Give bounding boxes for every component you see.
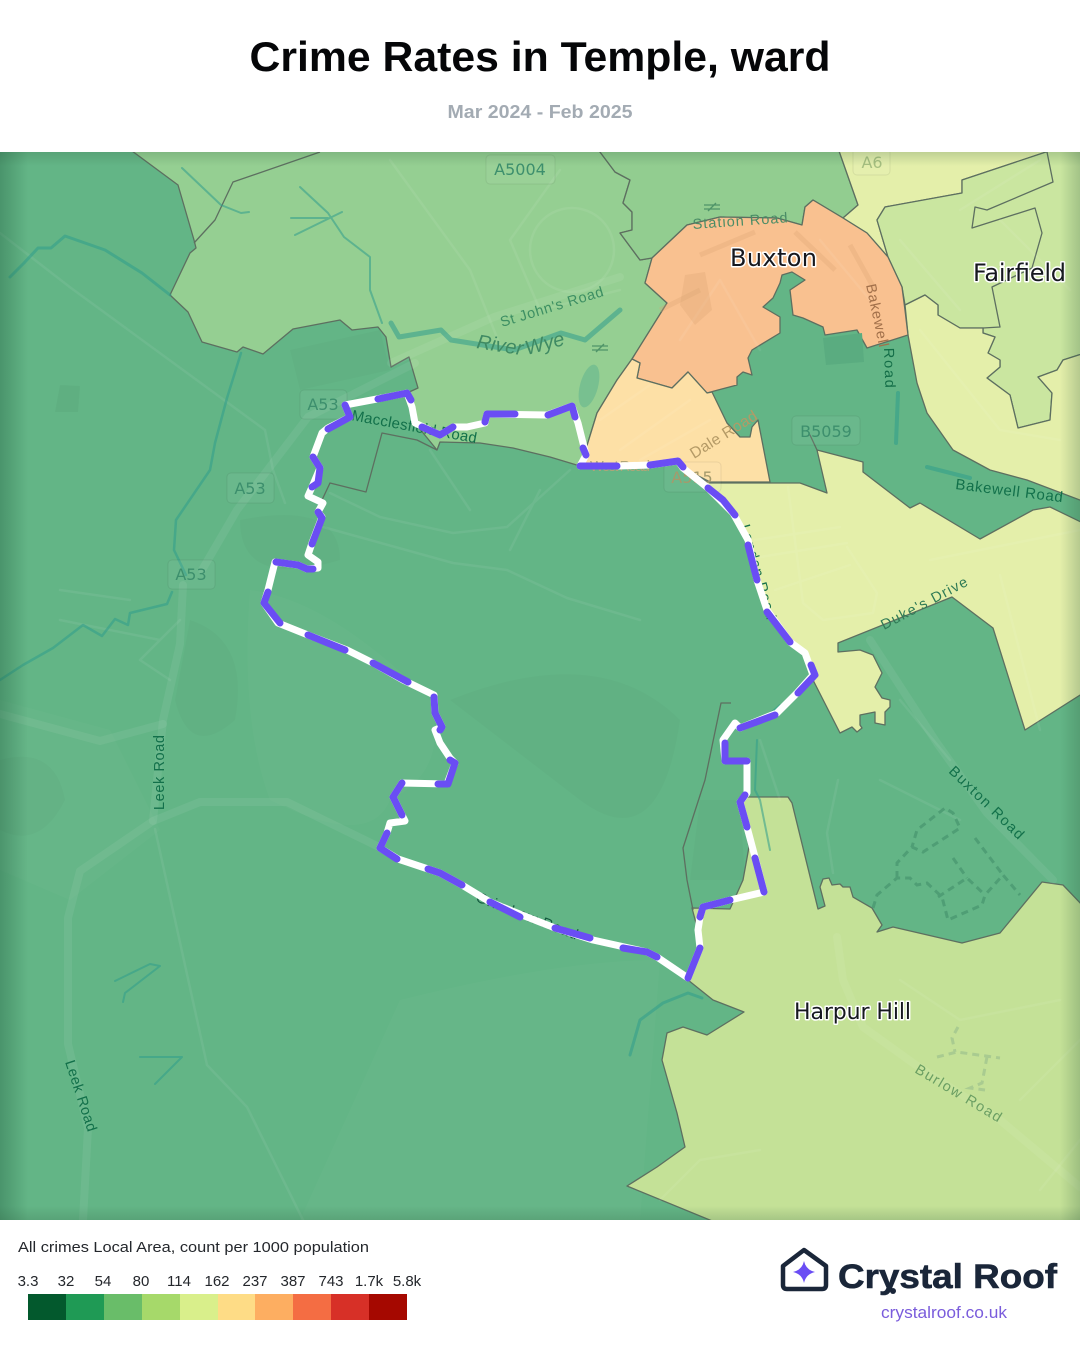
- road labels: [61, 210, 1064, 1134]
- choropleth region: Harpur Hill green: [627, 797, 1080, 1225]
- road badge: A53 middle: A53: [234, 479, 266, 498]
- rail and road texture inside Buxton: [660, 232, 875, 310]
- road labels: West Road: [590, 459, 650, 475]
- choropleth region: north-west light green: [128, 148, 667, 466]
- legend scale values: 387: [280, 1273, 306, 1290]
- legend scale values: 5.8k: [393, 1273, 422, 1290]
- road badge: A5004: A5004: [494, 160, 546, 179]
- legend: [18, 1239, 422, 1320]
- legend title: All crimes Local Area, count per 1000 population: [18, 1239, 369, 1256]
- choropleth region: east pale yellow: [905, 295, 1080, 502]
- dark block inside central green area: [823, 333, 864, 365]
- place label: Fairfield: Fairfield: [973, 259, 1066, 287]
- road badge: A53 north: A53: [307, 395, 339, 414]
- logo wordmark: Crystal Roof: [838, 1258, 1058, 1296]
- logo: Crystal Roof: [783, 1250, 1058, 1322]
- road badge: A515: A515: [671, 468, 713, 487]
- choropleth region: central pale yellow: [683, 435, 1080, 733]
- road badge: A53 north: [300, 390, 347, 419]
- road labels: Leek Road: [152, 735, 168, 810]
- road labels: Road: [880, 348, 897, 388]
- road labels: Station Road: [692, 210, 788, 233]
- road badge: A53 middle: [227, 473, 274, 503]
- road badge: B5059: B5059: [800, 422, 852, 441]
- place label: Harpur Hill: Harpur Hill: [794, 1000, 911, 1025]
- choropleth region: Fairfield green: [877, 148, 1080, 428]
- road badge: A6: A6: [861, 153, 883, 172]
- icon: rail station north: [704, 203, 720, 211]
- legend scale values: 3.3: [18, 1273, 38, 1290]
- choropleth region: north pale yellow strip: [838, 152, 1044, 254]
- map edge shading: [0, 152, 1080, 1220]
- choropleth region: tan: [580, 359, 770, 482]
- title: Crime Rates in Temple, ward: [250, 33, 830, 80]
- road labels: Dale Road: [687, 408, 761, 462]
- region outlines inside Fairfield: [972, 152, 1053, 328]
- subtitle: date range: Mar 2024 - Feb 2025: [448, 101, 632, 122]
- icon: rail station river: [592, 344, 608, 352]
- rivers and streams: [0, 168, 970, 1084]
- terrain patches: [0, 330, 745, 1220]
- road badge: A53 south: [168, 560, 215, 589]
- road badge: A515: [664, 462, 721, 492]
- road labels: Burlow Road: [912, 1062, 1004, 1126]
- road badge: B5059: [792, 416, 860, 445]
- road labels: Grin Low Road: [474, 890, 580, 943]
- legend scale values: 32: [58, 1273, 74, 1290]
- choropleth region: Buxton orange: [632, 200, 908, 393]
- road labels: Leek Road: [61, 1058, 99, 1134]
- road badge: A5004: [486, 155, 555, 184]
- legend scale values: 237: [242, 1273, 268, 1290]
- road labels: Bakewell Road: [955, 476, 1064, 506]
- road badge: A6: [852, 152, 890, 176]
- legend scale values: 1.7k: [355, 1273, 384, 1290]
- region outline: eastern pocket: [683, 703, 731, 910]
- road labels: Wye: [523, 328, 567, 360]
- place label: Buxton: Buxton: [730, 244, 817, 272]
- ward boundary: purple dashes: [264, 393, 815, 978]
- road labels: Duke's Drive: [878, 574, 971, 634]
- road labels: River: [475, 331, 526, 360]
- park texture inside Buxton: [680, 272, 712, 325]
- road labels: St John's Road: [498, 284, 605, 331]
- road network: [0, 160, 1080, 1220]
- legend scale values: 743: [318, 1273, 344, 1290]
- legend scale values: 80: [133, 1273, 149, 1290]
- region outline: north west boundary: [194, 152, 320, 243]
- legend colour bar: [28, 1294, 407, 1320]
- road labels: London Road: [736, 523, 779, 621]
- legend scale values: 54: [95, 1273, 111, 1290]
- road labels: Buxton Road: [945, 763, 1027, 843]
- ward boundary: white line: [264, 393, 813, 978]
- legend scale values: 162: [204, 1273, 230, 1290]
- website link: crystalroof.co.uk: [881, 1304, 1008, 1322]
- housing outlines near Buxton Road: [873, 808, 1020, 920]
- icon: house with star: [783, 1250, 826, 1289]
- choropleth region: north station green: [597, 148, 858, 260]
- legend scale values: [18, 1273, 422, 1290]
- map panel: [0, 148, 1080, 1225]
- region outline: western inlet: [322, 433, 437, 500]
- road badge: A53 south: A53: [175, 565, 207, 584]
- housing outlines near Burlow Road: [937, 1027, 1000, 1090]
- road labels: Macclesfield Road: [350, 407, 478, 447]
- legend scale values: 114: [167, 1273, 191, 1290]
- road labels: Bakewell: [862, 283, 891, 348]
